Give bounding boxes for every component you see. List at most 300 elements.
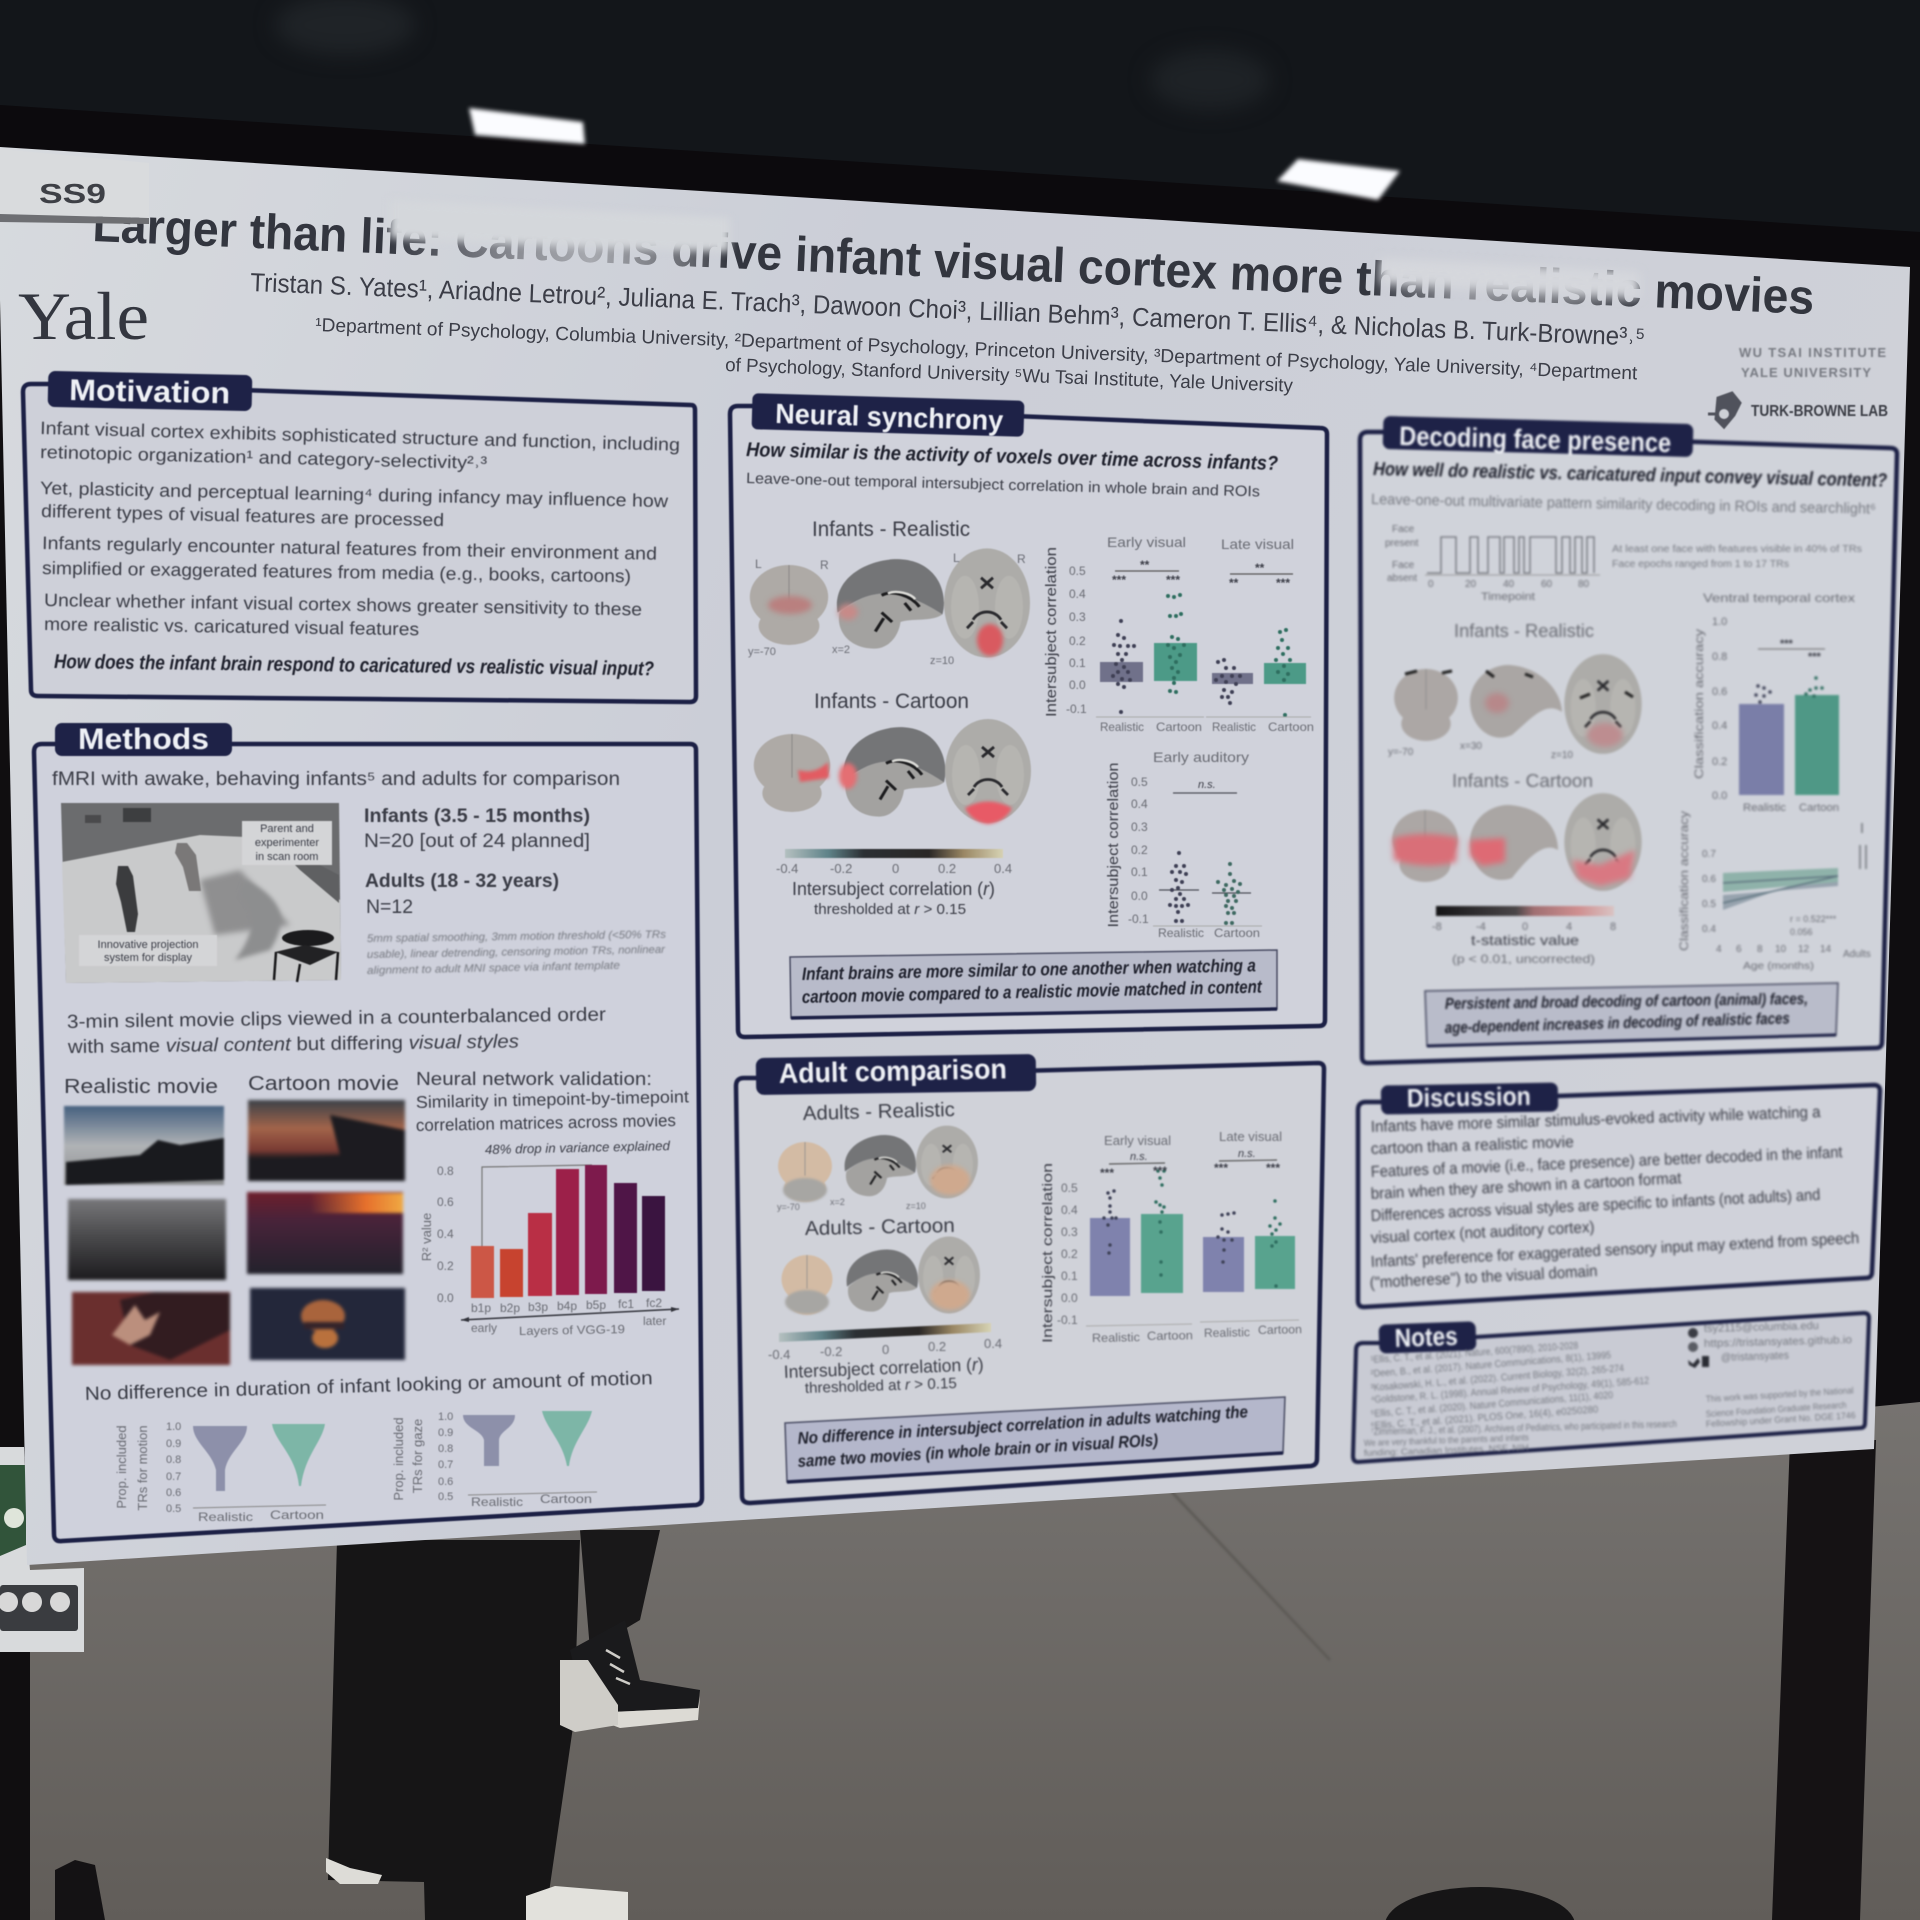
label: projection system: Innovative projection (98, 939, 198, 951)
scanner room image (61, 803, 341, 983)
brains: adults realistic: z=10 (906, 1201, 926, 1211)
references: ⁷Zimmerman, F. J., et al. (2007). Archives of Pediatrics, who participated in this research (1371, 1419, 1677, 1438)
colorbar: adult intersubject correlation: thresholded at r > 0.15 (805, 1375, 957, 1397)
shoe: high-top left (570, 1620, 700, 1728)
colorbar: intersubject correlation: -0.2 (830, 861, 852, 876)
colorbar: adult intersubject correlation: 0.2 (928, 1339, 946, 1354)
acknowledgement note: Science Foundation Graduate Research (1705, 1400, 1847, 1419)
chart: adult ISC early and late visual: -0.1 (1057, 1313, 1078, 1327)
motivation question: How does the infant brain respond to caricatured vs realistic visual input? (54, 651, 654, 680)
timeline note: At least one face with features visible in 40% of TRs (1612, 544, 1862, 555)
chart: adult ISC early and late visual: 0.4 (1061, 1203, 1078, 1217)
Yale logo: Yale (18, 278, 149, 354)
label: parent and experimenter: Parent and (260, 823, 314, 835)
chart: accuracy by age: Adults (1843, 949, 1871, 960)
neural network validation text: Neural network validation: (416, 1069, 652, 1089)
movie clips sentence: with same visual content but differing visual styles (67, 1031, 520, 1058)
bag on floor (1385, 1887, 1575, 1920)
brains: infants realistic: y=-70 (748, 646, 776, 658)
motivation text: Yet, plasticity and perceptual learning⁴ during infancy may influence how (40, 478, 669, 511)
violin plot: gaze: 1.0 (438, 1411, 453, 1423)
realistic frames (64, 1106, 230, 1365)
colorbar: intersubject correlation: 0.2 (938, 861, 956, 876)
heading tab (55, 723, 232, 756)
callout: decoding (1425, 983, 1838, 1046)
callout: adult comparison (785, 1397, 1285, 1482)
references: ³Kosakowski, H. L., et al. (2022). Current Biology, 32(2), 265-274 (1370, 1363, 1625, 1394)
bar chart: VGG-19 variance explained: later (643, 1314, 666, 1328)
chart: accuracy by age: 10 (1775, 944, 1787, 955)
chart: ventral temporal cortex bars (1692, 591, 1855, 814)
colorbar: t-statistic: -8 (1432, 921, 1442, 933)
person legs (326, 1530, 700, 1920)
bar chart: VGG-19 variance explained: 48% drop in variance explained (485, 1138, 671, 1157)
colorbar: adult intersubject correlation: 0 (882, 1342, 889, 1357)
chart: adult ISC early and late visual (1039, 1129, 1302, 1345)
panel: Motivation (23, 371, 696, 702)
heading: decoding infants cartoon: Infants - Cartoon (1452, 771, 1593, 791)
heading tab: Discussion (1407, 1081, 1531, 1113)
chart: adult ISC early and late visual: *** (1266, 1161, 1280, 1175)
SS9 tag: SS9 (39, 178, 106, 209)
brains: infants realistic: R (820, 558, 829, 572)
affiliations: of Psychology, Stanford University ⁵Wu Tsai Institute, Yale University (725, 355, 1294, 397)
chart: infant ISC early and late visual (1043, 534, 1314, 734)
bar chart: VGG-19 variance explained: 0.8 (437, 1164, 454, 1178)
chart: accuracy by age: 0.6 (1702, 874, 1716, 885)
discussion text: Features of a movie (i.e., face presence) are better decoded in the infant (1370, 1144, 1843, 1181)
discussion text: brain when they are shown in a cartoon format (1370, 1170, 1682, 1203)
cartoon frames (247, 1100, 405, 1360)
chart: early auditory: Cartoon (1214, 926, 1260, 940)
panel outline (730, 406, 1327, 1037)
Wu Tsai logo: WU TSAI INSTITUTE (1739, 345, 1886, 360)
chart: infant ISC early and late visual: ** (1255, 561, 1265, 575)
chart: early auditory: 0.2 (1131, 843, 1148, 857)
poster sheet (0, 147, 1910, 1565)
chart: infant ISC early and late visual: 0.0 (1069, 678, 1086, 692)
heading: decoding infants realistic: Infants - Realistic (1454, 621, 1594, 641)
chart: early auditory: n.s. (1198, 779, 1216, 791)
discussion text (1369, 1104, 1860, 1292)
affiliations: ¹Department of Psychology, Columbia University, ²Department of Psychology, Princeton University, ³Department of Psychology, Yale University, ⁴Department (315, 315, 1638, 385)
colorbar: t-statistic: t-statistic value (1471, 932, 1579, 948)
contact icons and links (1688, 1320, 1852, 1368)
violin plot: gaze: Realistic (471, 1495, 523, 1509)
callout: adult comparison: No difference in intersubject correlation in adults watching the (797, 1402, 1248, 1448)
chart: early auditory: 0.3 (1131, 820, 1148, 834)
motivation text: different types of visual features are processed (41, 501, 444, 530)
participant details: N=12 (366, 897, 413, 918)
panel: Discussion (1358, 1081, 1880, 1307)
brains: adults realistic: x=2 (830, 1197, 845, 1207)
authors: Tristan S. Yates¹, Ariadne Letrou², Juliana E. Trach³, Dawoon Choi³, Lillian Behm³, Cameron T. Ellis⁴, & Nicholas B. Turk-Browne³˒⁵ (250, 267, 1646, 352)
violin plot: motion: TRs for motion (135, 1425, 150, 1511)
title glare left (390, 200, 730, 252)
preprocessing note: usable), linear detrending, censoring motion TRs, nonlinear (367, 944, 666, 961)
chart: accuracy by age: Age (months) (1743, 961, 1814, 972)
chart: adult ISC early and late visual: Intersubject correlation (1039, 1163, 1055, 1343)
colorbar: intersubject correlation: Intersubject correlation (r) (792, 879, 995, 899)
chart: accuracy by age: r = 0.522*** (1790, 914, 1837, 924)
left stand pole (0, 300, 30, 1920)
colorbar: t-statistic: (p < 0.01, uncorrected) (1452, 952, 1595, 966)
acknowledgement note: This work was supported by the National (1706, 1385, 1854, 1404)
heading tab: Motivation (69, 374, 231, 410)
chart: face timeline: 20 (1465, 579, 1477, 590)
SS9 tag (0, 149, 149, 224)
chart: infant ISC early and late visual: ** (1229, 576, 1239, 590)
chart: early auditory: 0.1 (1131, 865, 1148, 879)
label: projection system (79, 935, 217, 966)
chair (274, 930, 338, 982)
participant details: N=20 [out of 24 planned] (364, 831, 590, 852)
contact icons and links: @tristansyates (1721, 1350, 1790, 1364)
brains: infants realistic: L (953, 551, 960, 565)
chart: infant ISC early and late visual: 0.2 (1069, 634, 1086, 648)
ceiling light right (1277, 159, 1400, 200)
colorbar: intersubject correlation: -0.4 (776, 861, 798, 876)
chart: adult ISC early and late visual: Realistic (1092, 1330, 1140, 1345)
references: ⁶Ellis, C. T., et al. (2021). PLOS One, 16(4), e0250280 (1370, 1404, 1599, 1432)
bar chart: VGG-19 variance explained: b3p (528, 1300, 548, 1314)
chart: ventral temporal cortex bars: *** (1780, 638, 1794, 650)
chart: face timeline: present (1385, 538, 1419, 549)
floor seam (1170, 1490, 1330, 1660)
brains: infants realistic: L (755, 557, 762, 571)
movie clips sentence: 3-min silent movie clips viewed in a counterbalanced order (67, 1004, 607, 1033)
heading: infants cartoon: Infants - Cartoon (814, 690, 969, 713)
chart: ventral temporal cortex bars: 0.2 (1712, 756, 1727, 768)
chart: early auditory: 0.0 (1131, 889, 1148, 903)
colorbar: t-statistic: -4 (1476, 921, 1486, 933)
sticker strip left (0, 1447, 84, 1652)
chart: ventral temporal cortex bars: *** (1808, 651, 1822, 663)
chart: ventral temporal cortex bars: Classification accuracy (1692, 629, 1706, 779)
chart: adult ISC early and late visual: 0.5 (1061, 1181, 1078, 1195)
references (1364, 1340, 1677, 1458)
motivation text (40, 418, 680, 639)
heading tab: Methods (78, 723, 209, 756)
brains: decoding realistic: y=-70 (1388, 747, 1414, 758)
violin plot: gaze: TRs for gaze (410, 1419, 425, 1493)
chart: infant ISC early and late visual: Realistic (1212, 720, 1256, 734)
bar chart: VGG-19 variance explained: R² value (419, 1213, 434, 1261)
chart: adult ISC early and late visual: n.s. (1238, 1148, 1256, 1160)
discussion text: Infants have more similar stimulus-evoked activity while watching a (1371, 1104, 1821, 1136)
realistic movie heading: Realistic movie (64, 1076, 218, 1098)
chart: ventral temporal cortex bars: Ventral temporal cortex (1703, 591, 1855, 605)
brains: decoding realistic: z=10 (1551, 750, 1573, 761)
chart: face timeline: 0 (1428, 579, 1434, 590)
callout: decoding: age-dependent increases in decoding of realistic faces (1445, 1010, 1790, 1037)
participant details: Adults (18 - 32 years) (365, 871, 559, 892)
chart: adult ISC early and late visual: Early visual (1104, 1133, 1171, 1148)
chart: infant ISC early and late visual: ** (1140, 558, 1150, 572)
violin plot: gaze: 0.6 (438, 1476, 453, 1488)
contact icons and links: tsy2115@columbia.edu (1704, 1320, 1819, 1335)
brains: infants cartoon (754, 719, 1031, 824)
colorbar: t-statistic (1432, 906, 1616, 966)
motivation text: Infants regularly encounter natural features from their environment and (42, 533, 657, 564)
chart: infant ISC early and late visual: Cartoon (1268, 720, 1314, 734)
colorbar: adult intersubject correlation: Intersubject correlation (r) (783, 1354, 984, 1382)
bar chart: VGG-19 variance explained: fc2 (646, 1296, 662, 1310)
colorbar: adult intersubject correlation: 0.4 (984, 1336, 1002, 1351)
bar chart: VGG-19 variance explained: early (471, 1321, 497, 1335)
discussion text: ("motherese") to the visual domain (1369, 1263, 1598, 1292)
callout: decoding: Persistent and broad decoding of cartoon (animal) faces, (1445, 991, 1808, 1013)
preprocessing note: 5mm spatial smoothing, 3mm motion threshold (<50% TRs (367, 929, 667, 945)
decoding method line: Leave-one-out multivariate pattern similarity decoding in ROIs and searchlight⁶ (1371, 491, 1876, 518)
ceiling light left (469, 108, 585, 144)
participant details: Infants (3.5 - 15 months) (364, 806, 590, 827)
references: funding: Canadian Institutes, NSF, NIH (1364, 1442, 1529, 1458)
chart: infant ISC early and late visual: Early visual (1107, 534, 1186, 550)
chart: infant ISC early and late visual: 0.3 (1069, 610, 1086, 624)
chart: face timeline: 60 (1541, 579, 1553, 590)
bar chart: VGG-19 variance explained: 0.2 (437, 1259, 454, 1273)
label: parent and experimenter (242, 821, 332, 865)
panel outline (1353, 1313, 1869, 1462)
references: ⁵Ellis, C. T., et al. (2020). Nature Communications, 11(1), 4020 (1370, 1390, 1614, 1420)
figure: parent (116, 866, 138, 932)
violin plot: motion: 0.7 (166, 1471, 181, 1483)
violin plot: motion: 0.8 (166, 1454, 181, 1466)
violin plot: motion: 0.6 (166, 1487, 181, 1499)
violin plot: motion: Realistic (198, 1510, 253, 1524)
shoe: white foot right (526, 1886, 628, 1920)
chart: ventral temporal cortex bars: 0.4 (1712, 720, 1727, 732)
chart: ventral temporal cortex bars: Cartoon (1799, 802, 1839, 814)
chart: adult ISC early and late visual: 0.3 (1061, 1225, 1078, 1239)
chart: early auditory (1105, 749, 1262, 940)
references: We are very thankful to the parents and infants (1364, 1432, 1529, 1448)
chart: adult ISC early and late visual: 0.1 (1061, 1269, 1078, 1283)
panel outline (1358, 1085, 1880, 1307)
violin plot: gaze: 0.5 (438, 1491, 453, 1503)
callout: adult comparison: same two movies (in whole brain or in visual ROIs) (797, 1431, 1159, 1471)
chart: adult ISC early and late visual: Cartoon (1147, 1328, 1193, 1343)
chart: early auditory: 0.5 (1131, 775, 1148, 789)
chart: early auditory: Intersubject correlation (1105, 762, 1122, 928)
panel: Adult comparison (736, 1053, 1324, 1503)
callout: neural synchrony: cartoon movie compared to a realistic movie matched in content (802, 977, 1263, 1007)
chart: accuracy by age: 8 (1757, 944, 1763, 955)
shoe: white foot left (326, 1858, 382, 1884)
chart: ventral temporal cortex bars: 0.6 (1712, 686, 1727, 698)
heading: adults cartoon: Adults - Cartoon (805, 1215, 955, 1240)
neural network validation text: Similarity in timepoint-by-timepoint (416, 1087, 689, 1112)
panel outline (1360, 432, 1897, 1063)
figure: experimenter (175, 843, 201, 891)
acknowledgement note (1705, 1385, 1856, 1429)
bar chart: VGG-19 variance explained: b2p (500, 1301, 520, 1315)
title glare right (1380, 258, 1640, 299)
timeline note: Face epochs ranged from 1 to 17 TRs (1612, 559, 1789, 570)
label: projection system: system for display (104, 952, 193, 964)
chart: ventral temporal cortex bars: 0.8 (1712, 651, 1727, 663)
chart: accuracy by age: 0.7 (1702, 849, 1716, 860)
chart: accuracy by age (1677, 811, 1871, 972)
acknowledgement note: Fellowship under Grant No. DGE 1746 (1706, 1410, 1856, 1429)
chart: infant ISC early and late visual: Late visual (1221, 536, 1294, 552)
violin plot: gaze: Prop. included (391, 1417, 406, 1501)
chart: face timeline: 40 (1503, 579, 1515, 590)
references: ⁴Goldstone, R. L. (1998). Annual Review of Psychology, 49(1), 585-612 (1370, 1376, 1650, 1406)
chart: ventral temporal cortex bars: 0.0 (1712, 790, 1727, 802)
discussion text: cartoon than a realistic movie (1371, 1134, 1574, 1158)
chart: face timeline: Face (1392, 560, 1415, 571)
object at floor left (55, 1860, 105, 1920)
timeline note (1612, 544, 1862, 570)
violin plot: gaze: 0.9 (438, 1427, 453, 1439)
chart: infant ISC early and late visual: Intersubject correlation (1043, 547, 1060, 717)
chart: adult ISC early and late visual: Cartoon (1258, 1322, 1302, 1337)
bar chart: VGG-19 variance explained: b5p (586, 1298, 606, 1312)
bar chart: VGG-19 variance explained: 0.4 (437, 1227, 454, 1241)
panel outline (34, 744, 702, 1541)
chart: adult ISC early and late visual: Realistic (1204, 1325, 1250, 1340)
motivation text: Infant visual cortex exhibits sophisticated structure and function, including (40, 418, 680, 455)
brains: adults realistic (777, 1126, 978, 1212)
neural question: How similar is the activity of voxels over time across infants? (746, 439, 1278, 475)
colorbar: adult intersubject correlation (768, 1323, 1002, 1397)
callout: neural synchrony (790, 950, 1277, 1018)
heading tab (48, 371, 252, 411)
bar chart: VGG-19 variance explained: fc1 (618, 1297, 634, 1311)
shoe: rear (560, 1660, 618, 1732)
chart: infant ISC early and late visual: -0.1 (1066, 702, 1087, 716)
Wu Tsai logo (1739, 345, 1886, 380)
panel: Neural synchrony (730, 393, 1327, 1037)
floor (0, 1400, 1920, 1920)
chart: adult ISC early and late visual: n.s. (1130, 1151, 1148, 1163)
violin plot: motion: 0.5 (166, 1503, 181, 1515)
heading tab: Notes (1394, 1321, 1458, 1353)
panel: Methods (34, 723, 702, 1541)
chart: infant ISC early and late visual: 0.1 (1069, 656, 1086, 670)
violin plot: motion: Cartoon (270, 1508, 324, 1522)
chart: infant ISC early and late visual: 0.4 (1069, 587, 1086, 601)
right dark booth wall (1860, 260, 1920, 1408)
heading: infants realistic: Infants - Realistic (812, 518, 970, 541)
chart: infant ISC early and late visual: 0.5 (1069, 564, 1086, 578)
colorbar: intersubject correlation: 0.4 (994, 861, 1012, 876)
chart: early auditory: Early auditory (1153, 749, 1249, 765)
chart: adult ISC early and late visual: *** (1100, 1166, 1114, 1180)
neural network validation text: correlation matrices across movies (416, 1111, 676, 1135)
motivation text: simplified or exaggerated features from media (e.g., books, cartoons) (42, 558, 631, 586)
brains: infants realistic: R (1017, 552, 1026, 566)
right stand leg (1772, 1440, 1876, 1920)
chart: early auditory: -0.1 (1128, 912, 1149, 926)
bar chart: VGG-19 variance explained: 0.6 (437, 1195, 454, 1209)
panel outline (736, 1063, 1324, 1503)
cartoon movie heading: Cartoon movie (248, 1073, 399, 1095)
chart: accuracy by age: 0.4 (1702, 924, 1716, 935)
panel: Notes (1353, 1313, 1869, 1462)
fMRI sentence: fMRI with awake, behaving infants⁵ and adults for comparison (52, 769, 620, 790)
chart: accuracy by age: 14 (1820, 944, 1832, 955)
panel outline (23, 384, 696, 702)
motivation text: Unclear whether infant visual cortex shows greater sensitivity to these (44, 590, 642, 619)
discussion text: Differences across visual styles are specific to infants (not adults) and (1370, 1187, 1821, 1225)
references: ²Deen, B., et al. (2017). Nature Communications, 8(1), 13995 (1370, 1350, 1612, 1380)
chart: accuracy by age: 12 (1798, 944, 1810, 955)
chart: accuracy by age: 6 (1736, 944, 1742, 955)
heading tab: Adult comparison (778, 1053, 1007, 1089)
heading tab: Decoding face presence (1399, 421, 1672, 458)
chart: adult ISC early and late visual: Late visual (1219, 1129, 1282, 1144)
chart: early auditory: 0.4 (1131, 797, 1148, 811)
discussion text: Infants' preference for exaggerated sensory input may extend from speech (1370, 1230, 1860, 1271)
chart: adult ISC early and late visual: 0.2 (1061, 1247, 1078, 1261)
chart: accuracy by age: Classification accuracy (1677, 811, 1691, 951)
bar chart: VGG-19 variance explained: Layers of VGG-19 (519, 1322, 625, 1338)
violin plot: gaze: Cartoon (540, 1492, 592, 1506)
chart: ventral temporal cortex bars: 1.0 (1712, 616, 1727, 628)
colorbar: intersubject correlation: 0 (892, 861, 899, 876)
chart: accuracy by age: 4 (1716, 944, 1722, 955)
chart: infant ISC early and late visual: Realistic (1100, 720, 1144, 734)
Turk-Browne lab logo: TURK-BROWNE LAB (1751, 403, 1888, 420)
violin plot: motion: 0.9 (166, 1438, 181, 1450)
chart: adult ISC early and late visual: 0.0 (1061, 1291, 1078, 1305)
chart: infant ISC early and late visual: Cartoon (1156, 720, 1202, 734)
participant details (364, 806, 590, 918)
brains: infants realistic: z=10 (930, 655, 954, 667)
brains: decoding cartoon (1392, 793, 1642, 891)
colorbar: adult intersubject correlation: -0.4 (768, 1347, 790, 1362)
motivation text: more realistic vs. caricatured visual features (44, 614, 419, 639)
brains: decoding realistic (1388, 654, 1642, 761)
brains: adults realistic: y=-70 (777, 1202, 800, 1212)
callout: neural synchrony: Infant brains are more similar to one another when watching a (802, 955, 1256, 984)
neural network validation text (416, 1069, 689, 1135)
heading tab: Neural synchrony (775, 398, 1004, 436)
no difference sentence: No difference in duration of infant looking or amount of motion (85, 1368, 653, 1405)
label: parent and experimenter: in scan room (256, 851, 318, 863)
chart: face timeline: Face (1392, 524, 1415, 535)
colorbar: t-statistic: 8 (1610, 921, 1616, 933)
chart: face timeline: 80 (1578, 579, 1590, 590)
references: ¹Ellis, C. T., et al. (2021). Nature, 600(7890), 2010-2028 (1370, 1340, 1579, 1366)
neural method line: Leave-one-out temporal intersubject correlation in whole brain and ROIs (746, 470, 1260, 500)
chart: infant ISC early and late visual: *** (1166, 573, 1180, 587)
chart: adult ISC early and late visual: *** (1214, 1161, 1228, 1175)
violin plot: gaze: 0.8 (438, 1443, 453, 1455)
brains: adults cartoon (782, 1237, 980, 1315)
colorbar: adult intersubject correlation: -0.2 (820, 1344, 842, 1359)
colorbar: intersubject correlation: thresholded at r > 0.15 (814, 901, 966, 918)
brains: infants realistic: x=2 (832, 644, 850, 656)
colorbar: intersubject correlation (776, 849, 1012, 918)
colorbar: t-statistic: 4 (1566, 921, 1572, 933)
Turk-Browne lab logo (1708, 393, 1888, 427)
bar chart: VGG-19 variance explained: b1p (471, 1301, 491, 1315)
chart: accuracy by age: 0.056 (1790, 927, 1813, 937)
chart: ventral temporal cortex bars: Realistic (1743, 802, 1787, 814)
heading: adults realistic: Adults - Realistic (803, 1099, 955, 1125)
chart: face timeline (1385, 524, 1600, 603)
chart: infant ISC early and late visual: *** (1112, 573, 1126, 587)
Wu Tsai logo: YALE UNIVERSITY (1741, 365, 1871, 380)
movie clips sentence (67, 1004, 607, 1058)
bar chart: VGG-19 variance explained: b4p (557, 1299, 577, 1313)
preprocessing note (367, 929, 667, 977)
violin plot: motion: 1.0 (166, 1421, 181, 1433)
